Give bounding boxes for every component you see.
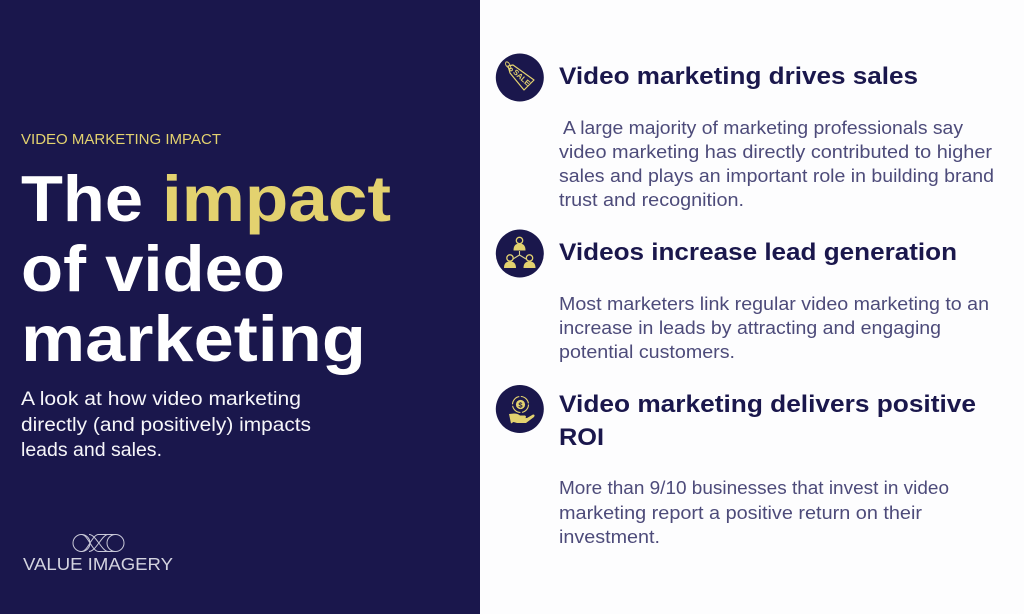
section: video marketing drives sales	[496, 54, 994, 210]
body text: More than 9/10 businesses that invest in video	[559, 478, 949, 498]
body text: A large majority of marketing professionals say	[563, 118, 963, 138]
subtitle: directly (and positively) impacts	[21, 415, 311, 436]
logo: Value Imagery	[23, 534, 173, 574]
body text	[559, 478, 949, 547]
body text: Most marketers link regular video marketing to an	[559, 294, 989, 314]
heading	[559, 391, 976, 451]
heading: Video marketing drives sales	[559, 63, 918, 90]
heading: Video marketing delivers positive	[559, 391, 976, 418]
body text: video marketing has directly contributed to higher	[559, 142, 992, 162]
subtitle: leads and sales.	[21, 440, 162, 461]
section: video marketing delivers positive ROI	[496, 385, 976, 547]
title: impact	[162, 162, 391, 235]
section: videos increase lead generation	[496, 230, 989, 362]
title: of video	[21, 232, 285, 305]
icon: hand holding money	[496, 385, 544, 433]
heading: ROI	[559, 424, 604, 451]
icon: sale tag	[496, 54, 544, 102]
title: The	[21, 162, 143, 235]
body text: trust and recognition.	[559, 190, 744, 210]
panel: left navy background	[0, 0, 480, 614]
body text: investment.	[559, 527, 660, 547]
panel: right background	[480, 0, 1024, 614]
subtitle: A look at how video marketing	[21, 389, 301, 410]
heading: Videos increase lead generation	[559, 239, 957, 266]
body text: sales and plays an important role in building brand	[559, 166, 994, 186]
body text	[559, 294, 989, 362]
icon: sale tag: SALE	[511, 68, 532, 88]
icon: connected people	[496, 230, 544, 278]
title: marketing	[21, 302, 366, 375]
body text: potential customers.	[559, 342, 735, 362]
body text: increase in leads by attracting and engaging	[559, 318, 941, 338]
logo: Value Imagery: VALUE IMAGERY	[23, 554, 173, 574]
body text	[559, 118, 994, 210]
eyebrow label: VIDEO MARKETING IMPACT	[21, 131, 221, 148]
title	[21, 162, 391, 375]
body text: marketing report a positive return on their	[559, 503, 922, 523]
icon: hand holding money: $	[518, 400, 523, 409]
subtitle	[21, 389, 311, 461]
